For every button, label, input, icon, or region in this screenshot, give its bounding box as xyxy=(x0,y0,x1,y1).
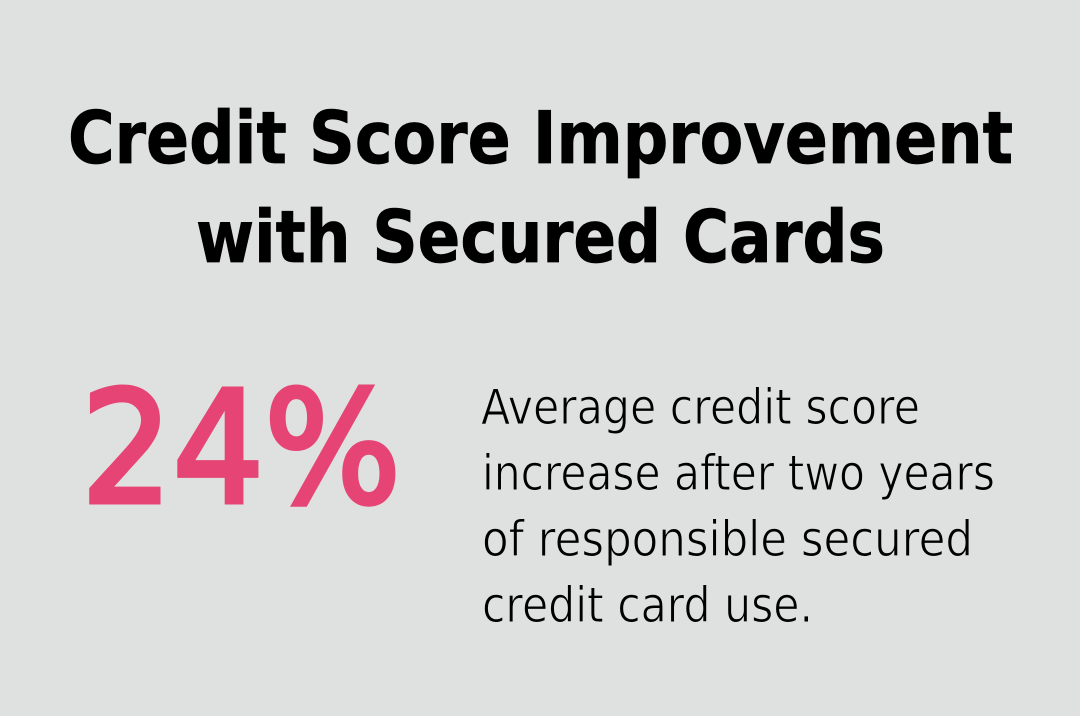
title: with Secured Cards xyxy=(196,195,885,279)
title xyxy=(68,96,1013,279)
description text: Average credit score xyxy=(481,379,920,436)
description text: of responsible secured xyxy=(482,511,973,568)
statistic: 24%: 24% xyxy=(81,358,401,539)
description text: credit card use. xyxy=(482,577,813,634)
description text: increase after two years xyxy=(482,445,995,502)
description text xyxy=(481,379,995,634)
